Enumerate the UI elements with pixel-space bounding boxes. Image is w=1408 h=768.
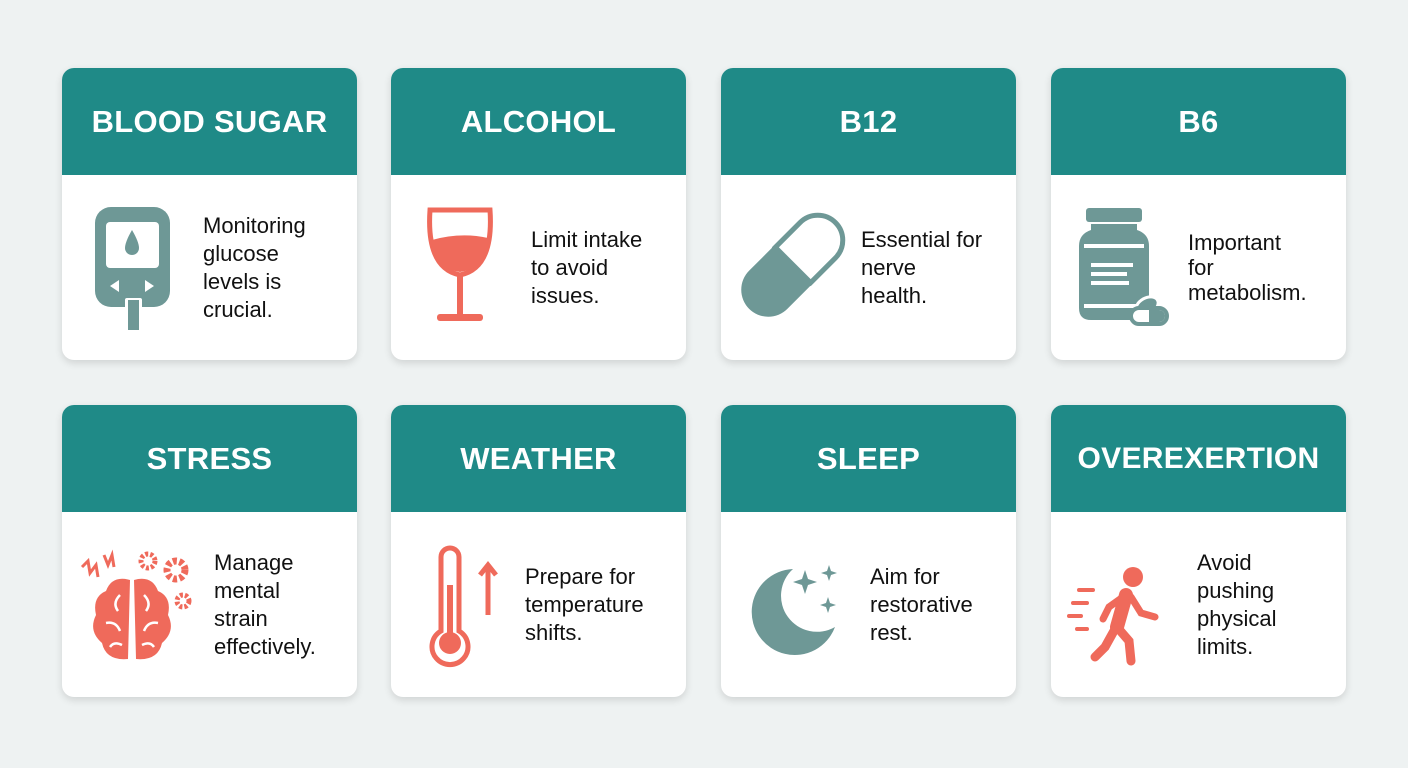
text: overexertion: pushing xyxy=(1197,578,1274,603)
heading: alcohol: ALCOHOL xyxy=(461,104,616,139)
text: alcohol: Limit intake xyxy=(531,227,642,252)
heading: sleep xyxy=(721,405,1016,512)
text: stress xyxy=(214,550,316,659)
text: b12: Essential for xyxy=(861,227,982,252)
text: b6: metabolism. xyxy=(1188,280,1307,305)
text: overexertion: physical xyxy=(1197,606,1276,631)
icon: moon and stars xyxy=(752,565,837,655)
text: stress: Manage xyxy=(214,550,294,575)
icon: thermometer xyxy=(429,546,498,668)
text: overexertion: limits. xyxy=(1197,634,1253,659)
heading: b12 xyxy=(721,68,1016,175)
heading: weather: WEATHER xyxy=(460,441,617,476)
text: blood sugar: glucose xyxy=(203,241,279,266)
text: b12 xyxy=(861,227,982,308)
icon: capsule xyxy=(741,212,846,317)
text: overexertion xyxy=(1197,550,1276,659)
text: weather xyxy=(525,564,644,645)
heading: b6: B6 xyxy=(1178,104,1219,139)
icon: wine glass xyxy=(427,208,493,321)
text: b12: nerve xyxy=(861,255,916,280)
card: b12 xyxy=(721,68,1016,360)
text: blood sugar: levels is xyxy=(203,269,281,294)
card: b6 xyxy=(1051,68,1346,360)
text: alcohol: issues. xyxy=(531,283,599,308)
card: stress xyxy=(62,405,357,697)
heading: b12: B12 xyxy=(840,104,897,139)
text: alcohol: to avoid xyxy=(531,255,608,280)
text: stress: strain xyxy=(214,606,268,631)
heading: stress xyxy=(62,405,357,512)
text: sleep xyxy=(870,564,973,645)
heading: sleep: SLEEP xyxy=(817,441,920,476)
text: stress: mental xyxy=(214,578,280,603)
heading: overexertion xyxy=(1051,405,1346,512)
card: alcohol xyxy=(391,68,686,360)
icon: glucose meter xyxy=(95,207,170,330)
heading: stress: STRESS xyxy=(147,441,272,476)
card: blood sugar xyxy=(62,68,357,360)
text: b6 xyxy=(1188,230,1307,305)
text: blood sugar: Monitoring xyxy=(203,213,306,238)
text: alcohol xyxy=(531,227,642,308)
text: b6: Important xyxy=(1188,230,1281,255)
heading: blood sugar xyxy=(62,68,357,175)
text: sleep: Aim for xyxy=(870,564,940,589)
text: blood sugar xyxy=(203,213,306,322)
heading: b6 xyxy=(1051,68,1346,175)
text: weather: shifts. xyxy=(525,620,582,645)
heading: overexertion: OVEREXERTION xyxy=(1078,442,1319,475)
icon: runner xyxy=(1067,567,1158,666)
text: weather: temperature xyxy=(525,592,644,617)
text: b12: health. xyxy=(861,283,927,308)
card: overexertion xyxy=(1051,405,1346,697)
text: sleep: rest. xyxy=(870,620,913,645)
text: stress: effectively. xyxy=(214,634,316,659)
heading: alcohol xyxy=(391,68,686,175)
card: weather xyxy=(391,405,686,697)
heading: weather xyxy=(391,405,686,512)
card: sleep xyxy=(721,405,1016,697)
text: weather: Prepare for xyxy=(525,564,635,589)
text: overexertion: Avoid xyxy=(1197,550,1252,575)
icon: brain with gears xyxy=(81,550,192,660)
text: sleep: restorative xyxy=(870,592,973,617)
heading: blood sugar: BLOOD SUGAR xyxy=(92,104,327,139)
text: blood sugar: crucial. xyxy=(203,297,273,322)
text: b6: for xyxy=(1188,255,1214,280)
icon: vitamin bottle xyxy=(1079,208,1169,326)
